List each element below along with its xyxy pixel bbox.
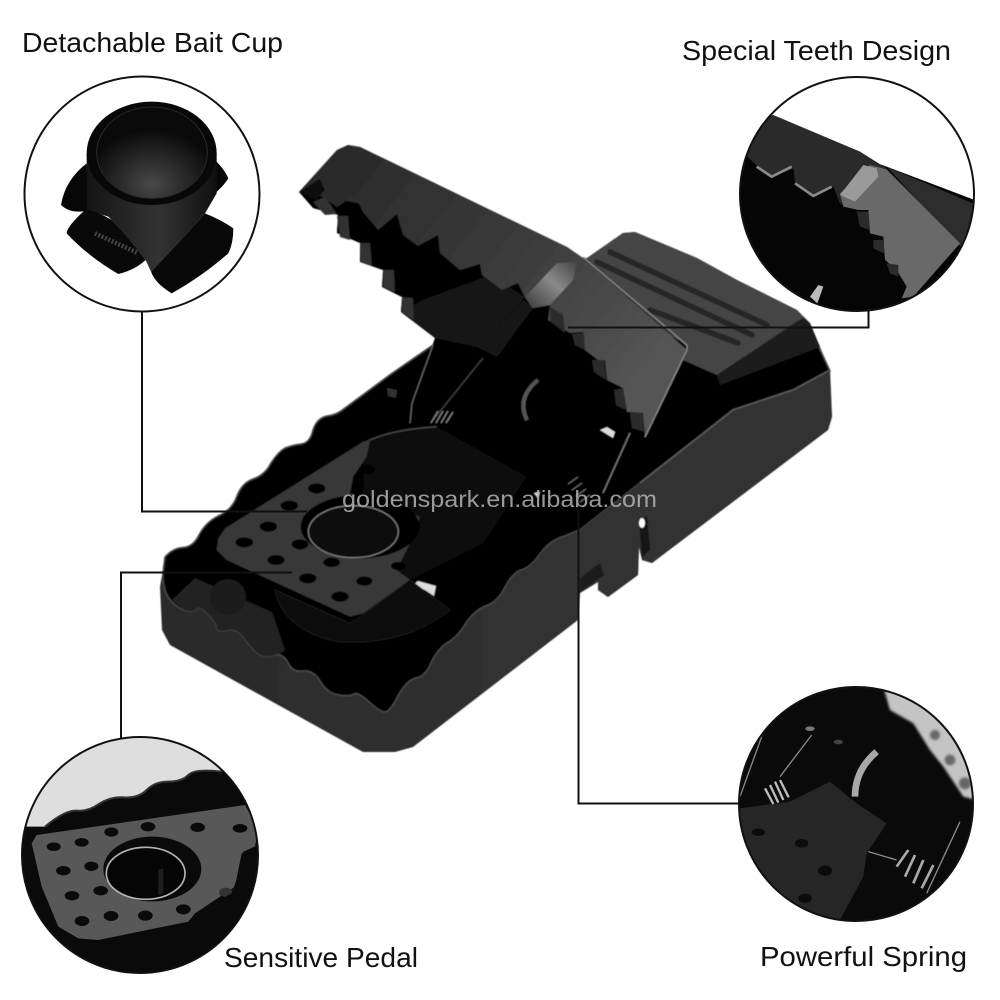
leader line: bait cup (142, 311, 307, 512)
spring close-up (740, 691, 972, 919)
teeth shadow dots (930, 730, 971, 789)
bait cup ring (301, 495, 419, 558)
pedal close-up (26, 738, 256, 940)
jaw flap edge (583, 257, 687, 437)
leader line: spring (578, 510, 738, 804)
detail circle: pedal (15, 730, 268, 973)
jaw front dark tooth (299, 179, 325, 200)
hinge hoop (523, 380, 538, 420)
arm rod (433, 358, 483, 420)
ring rim (106, 847, 185, 899)
handle front edge (717, 318, 820, 385)
side notch (639, 516, 650, 557)
label: sensitive pedal: Sensitive Pedal (224, 942, 418, 973)
arm edge (410, 345, 433, 423)
leader line: pedal (121, 572, 292, 738)
detail circle: bait cup (24, 76, 260, 312)
flap tooth pieces (550, 307, 645, 432)
handle part (887, 167, 977, 250)
lip highlight (45, 771, 222, 827)
plate holes (752, 829, 832, 903)
dark underside (741, 157, 973, 310)
tab embossed text (95, 233, 138, 253)
jaw bend highlight (525, 262, 577, 308)
lower arm edge (603, 433, 630, 493)
teeth close-up (741, 115, 973, 310)
flap (840, 165, 960, 298)
ring gleam (158, 868, 163, 895)
handle corner (730, 279, 807, 323)
plate holes (47, 822, 247, 926)
coil right (568, 477, 590, 502)
label: special teeth design: Special Teeth Design (682, 35, 951, 66)
side face (580, 370, 832, 597)
plate underside disc (275, 580, 450, 642)
outline (22, 737, 258, 973)
cup back tabs (61, 160, 228, 212)
trap body silhouette (160, 145, 832, 752)
arm edge (740, 735, 960, 893)
floor circle (210, 579, 246, 615)
slot (580, 563, 604, 592)
plate dark part (363, 427, 527, 613)
plate dark rim (363, 427, 437, 443)
upper jaw (299, 145, 687, 437)
under-jaw plate (401, 275, 525, 347)
leader line: teeth (568, 311, 868, 328)
tray interior (163, 280, 830, 712)
arm bar (477, 300, 533, 357)
cup interior (97, 107, 207, 198)
peg (387, 388, 397, 398)
tray floor (172, 578, 285, 656)
plate lit part (217, 440, 420, 617)
rivets (805, 726, 843, 744)
hoop (855, 752, 877, 797)
detail circle: spring (739, 687, 990, 923)
detail circle: teeth (739, 76, 975, 312)
cup front tabs (67, 210, 233, 293)
under-jaw shadow (299, 192, 680, 445)
tooth edges (757, 167, 832, 196)
outline (739, 687, 973, 921)
right coil (897, 850, 933, 888)
bait cup (61, 102, 233, 293)
teeth thickness (313, 197, 414, 320)
bend highlight (840, 165, 878, 202)
label: detachable bait cup: Detachable Bait Cup (22, 27, 283, 58)
coil left (431, 411, 453, 423)
pedal plate (217, 427, 527, 642)
light gaps (412, 427, 615, 596)
light corner (882, 691, 972, 801)
side highlight (640, 370, 830, 483)
outline (740, 77, 974, 311)
watermark: goldenspark.en.alibaba.com (342, 486, 657, 512)
ring (103, 837, 201, 901)
left coil (765, 780, 789, 804)
plate (32, 805, 258, 940)
mouse trap (160, 145, 832, 752)
jaw plate (747, 115, 886, 204)
label: powerful spring: Powerful Spring (760, 941, 967, 972)
background light (26, 738, 222, 827)
cup rim (87, 102, 217, 205)
handle (587, 232, 803, 375)
pedal plate (739, 782, 887, 923)
shadow on plate (194, 846, 255, 914)
plate holes (236, 465, 406, 602)
cup body (87, 153, 217, 272)
gap (810, 285, 823, 303)
handle grooves (597, 252, 767, 343)
tooth shadow (857, 212, 898, 277)
